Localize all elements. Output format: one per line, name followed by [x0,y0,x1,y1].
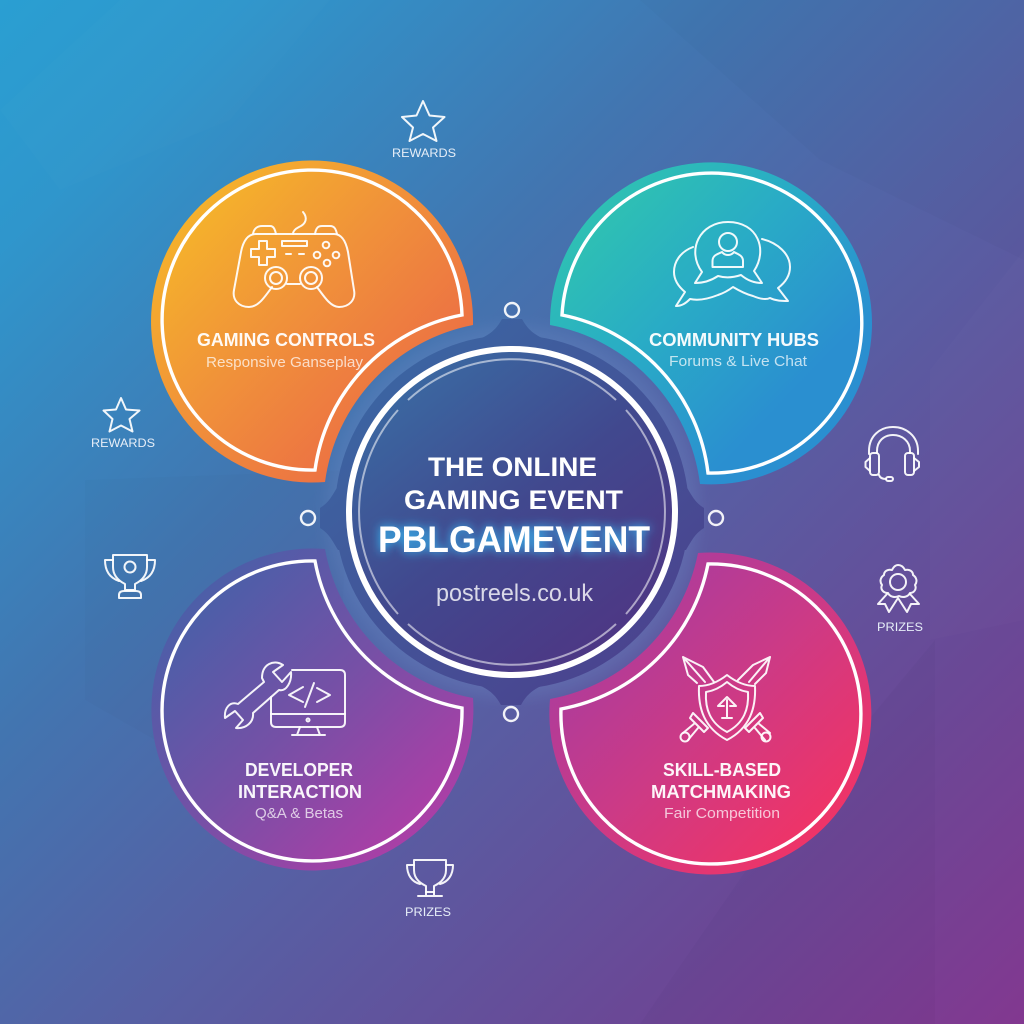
heading: community hubs: COMMUNITY HUBS [649,330,819,350]
icon: chat bubbles with person [674,222,790,306]
icon: star left with rewards label [91,398,155,450]
text: fair competition: Fair Competition [664,805,780,822]
heading: skill-based matchmaking [651,760,791,802]
heading: skill-based matchmaking: MATCHMAKING [651,782,791,802]
icon: game controller [234,212,354,307]
title: GAMING EVENT [404,485,624,515]
icon: shield and crossed swords [680,657,770,742]
panel: gaming controls [151,161,473,483]
heading: skill-based matchmaking: SKILL-BASED [663,760,781,780]
text: responsive gameplay: Responsive Ganseplay [206,354,363,371]
icon: trophy bottom with prizes label: PRIZES [405,905,451,919]
heading: developer interaction: INTERACTION [238,782,362,802]
icon: star top with rewards label: REWARDS [392,146,456,160]
text: forums and live chat: Forums & Live Chat [669,353,808,370]
panel: developer interaction [151,549,473,871]
heading: developer interaction [238,760,362,802]
event name with glow: PBLGAMEVENT [378,519,650,560]
center badge [349,349,675,675]
panel: skill-based matchmaking [549,553,871,875]
text: q and a and betas: Q&A & Betas [255,805,343,822]
icon: ribbon badge with prizes label [877,565,923,634]
title: THE ONLINE [428,452,597,482]
icon: star left with rewards label: REWARDS [91,436,155,450]
icon: trophy bottom with prizes label [405,860,453,919]
panel: community hubs [550,162,872,484]
icon: ribbon badge with prizes label: PRIZES [877,620,923,634]
inner ring arcs [359,359,665,665]
connector dots [301,303,723,721]
heading: developer interaction: DEVELOPER [245,760,353,780]
icon: headset [866,427,919,481]
title [404,452,624,515]
icon: star top with rewards label [392,101,456,160]
heading: gaming controls: GAMING CONTROLS [197,330,375,350]
icon: wrench and code monitor [225,663,345,735]
website: postreels.co.uk [436,580,594,607]
icon: trophy left [105,555,155,598]
center halo with spokes [320,319,704,705]
event name with glow: PBLGAMEVENT [378,519,650,560]
